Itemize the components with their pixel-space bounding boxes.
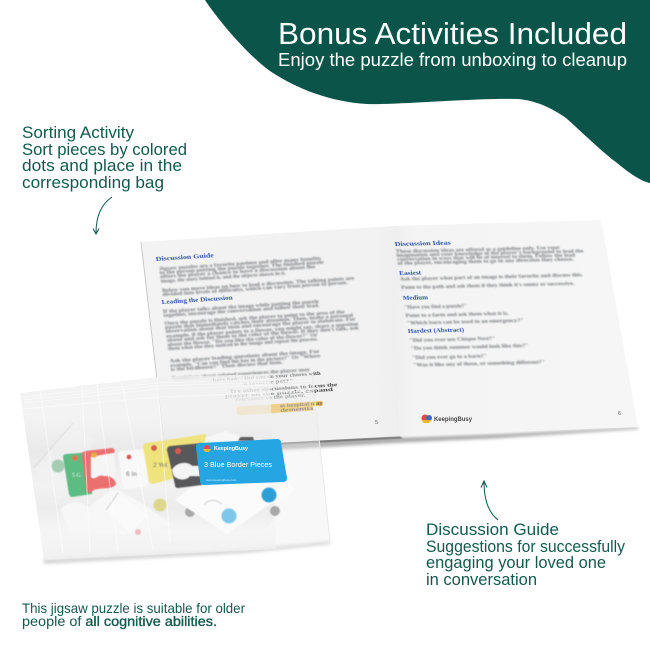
right page body copy: [396, 246, 602, 368]
left page body copy: Reminisce about related experiences the player may: [172, 368, 311, 382]
left page body copy: about and ask for them to the color of the flower. If they don't talk, ask: [167, 327, 360, 344]
sorted puzzle bags: [20, 372, 331, 564]
left page body copy: divided into levels of difficulty, which can vary from person to person.: [162, 281, 348, 298]
discussion guide callout: Suggestions for successfully: [426, 538, 626, 556]
left page headings: Discussion Guide: [155, 253, 215, 263]
right page body copy: Point to the path and ask them if they think it's sunny or successive.: [401, 282, 575, 291]
title: [278, 16, 627, 70]
card: blue: www.keepingbusy.com: [206, 478, 237, 482]
booklet shadow: [240, 427, 638, 452]
right page text: [394, 238, 602, 368]
bag seal stripes: [24, 378, 312, 403]
left page body copy: image, the story behind it, and the objects shown in it.: [161, 271, 286, 285]
text seen through the bag edge: a favorite pet?": [243, 379, 294, 387]
left page body copy: [157, 255, 368, 382]
discussion guide callout: Discussion Guide: [426, 521, 559, 539]
left page headings: Leading the Discussion: [161, 295, 234, 306]
left page body copy: them what else they noticed in the image and repeat the process.: [168, 338, 318, 352]
left page body copy: example, if the player points to a flower, you might say, share a question: [166, 322, 359, 340]
right page body copy: "Have you find a puzzle?": [404, 304, 468, 311]
text seen through the bag edge: [212, 371, 340, 404]
left page body copy: observation about that item and encourage the player to elaborate. For: [165, 318, 357, 335]
left page body copy: Ask the player leading questions about the image. For: [169, 350, 321, 365]
loose puzzle pieces: [34, 423, 318, 535]
sorting activity callout: corresponding bag: [22, 174, 164, 192]
right page headings: Easiest: [399, 270, 422, 277]
right page number: 6: [618, 411, 621, 417]
subtitle: Enjoy the puzzle from unboxing to cleanup: [278, 49, 627, 70]
title: Bonus Activities Included: [278, 16, 627, 51]
left page body copy: is the birdhouse?" Then discuss that item.: [171, 361, 283, 373]
right page headings: Medium: [403, 295, 429, 302]
discussion guide callout: engaging your loved one: [426, 554, 606, 572]
bag bodies: [20, 374, 276, 560]
text seen through the bag edge: have had: "Did you do your chores with: [212, 372, 321, 384]
discussion guide callout: in conversation: [426, 571, 537, 589]
right page body copy: conversation in ways that will be of interest to them. Follow the lead: [397, 254, 576, 263]
text seen through the bag edge: Try other discussions to focus the: [229, 383, 339, 395]
right page body copy: "Which barn can be used in an emergency?": [406, 319, 525, 326]
text seen through the bag edge: player on the puzzle, expand: [225, 388, 334, 400]
left page headings: [155, 252, 234, 306]
right page body copy: imagination and your knowledge of the player's background to lead the: [396, 249, 585, 259]
highlighted lines: [236, 401, 324, 417]
audience note: [22, 600, 245, 629]
booklet right page: [392, 220, 638, 436]
highlighted lines: dementia: [280, 407, 315, 414]
booklet logo: [421, 414, 473, 423]
right page headings: Hardest (Abstract): [407, 327, 465, 335]
left page body copy: example, "Can you find the bee in the picture?" Or "Where: [170, 354, 322, 369]
card: blue: 3 Blue Border Pieces: [204, 460, 272, 469]
right page body copy: "Was it like any of these, or something different?": [413, 360, 546, 368]
card: white: 6 In: [126, 471, 137, 478]
left page body copy: about the flower. "Do you like the color of the flower?" Or: [167, 333, 319, 348]
arrow: discussion guide to booklet: [481, 481, 498, 520]
right page body copy: Ask the player what part of an image is their favorite and discuss this.: [400, 273, 584, 282]
left page body copy: together, encourage the conversation and follow their lead.: [163, 304, 320, 319]
left page number: 5: [375, 420, 378, 426]
arrow: sorting activity to bags: [93, 197, 112, 234]
discussion guide booklet: [141, 220, 638, 452]
highlighted lines: at hospital may: [279, 402, 324, 410]
bag drop shadow: [43, 541, 331, 564]
discussion guide callout: [426, 521, 626, 589]
right page body copy: These discussion ideas are offered as a guideline only. Use your: [396, 246, 561, 255]
left page body copy: Jigsaw puzzles are a favorite pastime and offer many benefits: [159, 257, 322, 272]
sorting activity callout: Sort pieces by colored: [22, 141, 187, 159]
card: green: 5 G: [72, 473, 82, 479]
card: white: [118, 449, 148, 489]
audience note: people of all cognitive abilities.: [22, 613, 217, 629]
right page body copy: "Did you ever use Chique Nest?": [409, 337, 496, 344]
card: yellow: 2 Yel: [153, 462, 168, 469]
card: blue: [196, 439, 287, 485]
sorting activity callout: [22, 124, 187, 192]
bag edges: [22, 377, 312, 553]
left page body copy: If the player talks about the image while putting the puzzle: [163, 300, 320, 315]
card: blue: KeepingBusy: [214, 446, 249, 452]
right page body copy: "Do you think summer would look like this?": [410, 344, 530, 352]
sorting activity callout: dots and place in the: [22, 157, 182, 175]
booklet spine shadow band: [255, 436, 403, 446]
right page body copy: Point to a farm and ask them what it is.: [405, 312, 509, 319]
left page text: [155, 244, 373, 421]
audience note: This jigsaw puzzle is suitable for older: [22, 600, 245, 616]
card: yellow: [143, 434, 206, 484]
colored dots: [222, 488, 276, 524]
right page body copy: of the player, encouraging them to go in any direction they choose.: [397, 258, 574, 267]
right page body copy: "Did you ever go to a barn?": [412, 354, 488, 361]
header background shape: [205, 0, 650, 183]
booklet left page: [141, 226, 400, 449]
left page body copy: Once the puzzle is finished, ask the player to point to the area of the: [164, 310, 346, 327]
left page body copy: puzzle that immediately catches their attention. Then, make a personal: [165, 314, 354, 331]
left page body copy: to the person putting the puzzle together. The finished puzzle: [159, 261, 325, 276]
sorting activity callout: Sorting Activity: [22, 124, 135, 142]
card: dark: [167, 443, 202, 488]
left page body copy: Below you move ideas on how to lead a discussion. The talking points are: [162, 276, 356, 294]
right page headings: Discussion Ideas: [394, 241, 452, 248]
card: green: [63, 452, 92, 497]
left page body copy: offers the player a chance to have a discussion about the: [160, 265, 317, 280]
text seen through the bag edge: relevance to the player.: [235, 394, 306, 403]
booklet logo: KeepingBusy: [434, 417, 473, 423]
card: red: [82, 448, 116, 493]
right page headings: [394, 241, 466, 335]
